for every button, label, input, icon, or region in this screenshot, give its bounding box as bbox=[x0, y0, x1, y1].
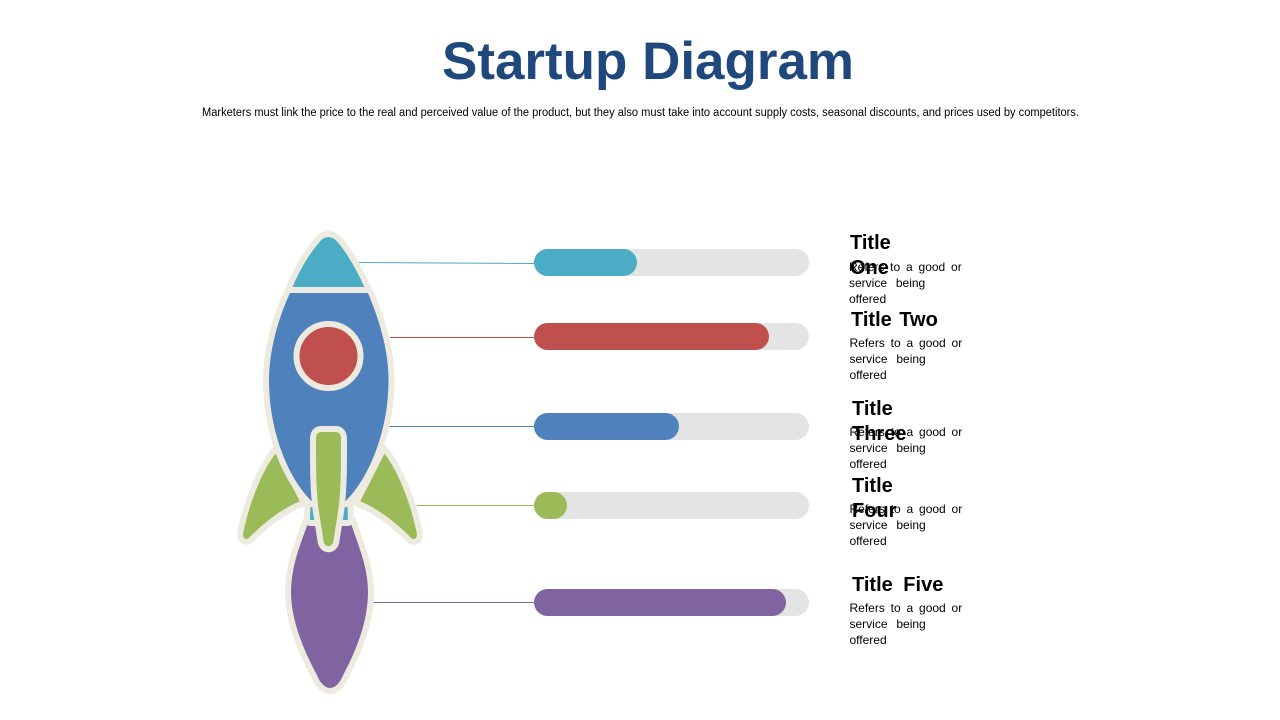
text block: title two bbox=[850, 309, 962, 382]
text block: title two: Title Two bbox=[851, 309, 938, 331]
text block: title three: offered bbox=[850, 457, 887, 471]
text block: title three: Title bbox=[852, 398, 893, 420]
text block: title one bbox=[849, 232, 962, 306]
icon: left fin bbox=[240, 448, 304, 542]
text block: title one: Refers to a good or bbox=[849, 260, 962, 274]
text block: title two: offered bbox=[850, 368, 887, 382]
text block: title four: offered bbox=[850, 534, 887, 548]
icon: teal nozzle bbox=[307, 503, 351, 523]
text block: title two: service being bbox=[850, 352, 926, 366]
progress bar: three bbox=[534, 413, 809, 440]
icon: rocket body bbox=[266, 290, 392, 504]
text block: title four: Refers to a good or bbox=[850, 502, 962, 516]
progress bar: two bbox=[534, 323, 809, 350]
progress bar: four bbox=[534, 492, 809, 519]
text block: title two: Refers to a good or bbox=[850, 336, 962, 350]
progress bar: five bbox=[534, 589, 809, 616]
text block: title one: Title bbox=[850, 232, 891, 254]
progress bar: one bbox=[534, 249, 809, 276]
icon: right fin bbox=[356, 448, 420, 542]
subtitle: Marketers must link the price to the real and perceived value of the product, but they also must take into account supply costs, seasonal discounts, and prices used by competitors. bbox=[202, 107, 1079, 119]
text block: title four: Four bbox=[852, 500, 897, 522]
icon: porthole bbox=[296, 324, 360, 388]
icon: purple flame bbox=[288, 520, 371, 691]
text block: title four: service being bbox=[850, 518, 926, 532]
icon: nose cone bbox=[288, 234, 369, 290]
text block: title one: One bbox=[850, 257, 889, 279]
text block: title five: offered bbox=[850, 633, 887, 647]
text block: title four: Title bbox=[852, 475, 893, 497]
icon: centre fin bbox=[313, 429, 344, 549]
text block: title three bbox=[850, 398, 962, 471]
text block: title one: offered bbox=[849, 292, 886, 306]
text block: title four bbox=[850, 475, 962, 548]
text block: title three: Three bbox=[852, 423, 906, 445]
text block: title five bbox=[850, 574, 962, 647]
text block: title five: service being bbox=[850, 617, 926, 631]
title: Startup Diagram bbox=[442, 32, 854, 91]
text block: title five: Title Five bbox=[852, 574, 943, 596]
rocket illustration bbox=[240, 234, 420, 691]
connector lines bbox=[359, 262, 534, 602]
text block: title three: Refers to a good or bbox=[850, 425, 962, 439]
text block: title one: service being bbox=[849, 276, 925, 290]
text block: title three: service being bbox=[850, 441, 926, 455]
text block: title five: Refers to a good or bbox=[850, 601, 962, 615]
